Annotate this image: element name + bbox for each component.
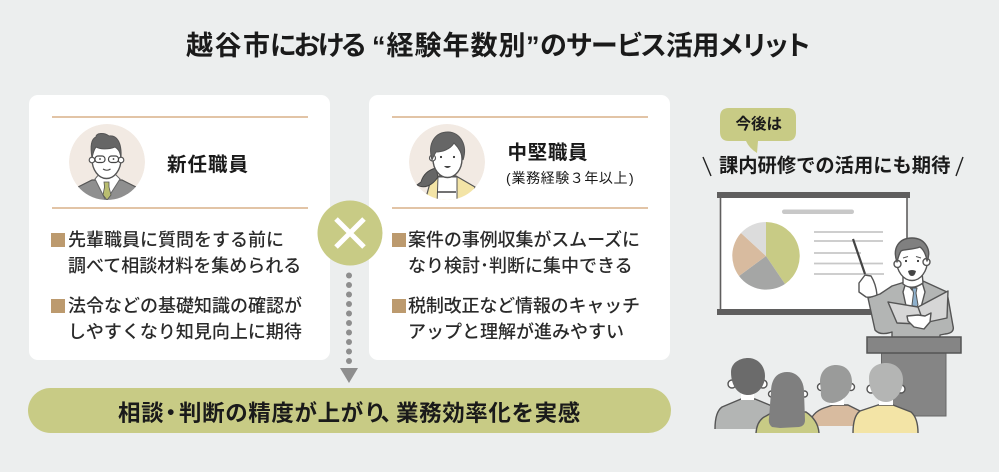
title: 越谷市 bbox=[186, 31, 270, 61]
title: 経験年数別 bbox=[386, 31, 526, 61]
heading: new staff: 新任職員 bbox=[167, 154, 248, 176]
pie chart bbox=[732, 222, 800, 290]
illustration: presentation screen with pie chart bbox=[717, 192, 910, 315]
text: experience note: 業務経験３年以上 bbox=[512, 170, 628, 186]
text block: mid-career benefit 2: アップと理解が進みやすい bbox=[408, 321, 624, 342]
title: のサービス活用メリット bbox=[540, 31, 810, 61]
text block: mid-career benefit 2 bbox=[392, 296, 640, 342]
callout: from now on: 今後は bbox=[736, 114, 782, 133]
text block: mid-career benefit 1 bbox=[392, 229, 640, 276]
icon: multiply sign bbox=[318, 200, 382, 266]
arrow: dotted down arrow bbox=[340, 272, 358, 383]
audience member 1 bbox=[715, 358, 781, 429]
banner: conclusion: 業務効率化を実感 bbox=[396, 401, 581, 426]
banner: conclusion: 、 bbox=[380, 401, 404, 426]
text block: new staff benefit 2 bbox=[51, 295, 302, 342]
title: “ bbox=[372, 31, 386, 61]
banner: conclusion bbox=[28, 388, 671, 433]
text: experience note: ( bbox=[506, 170, 511, 186]
heading: expected use in training: 課内研修での活用にも期待 bbox=[719, 155, 950, 177]
banner: conclusion: 判断の精度が上がり bbox=[179, 400, 387, 426]
text block: new staff benefit 1: 調べて相談材料を集められる bbox=[68, 256, 301, 276]
banner: conclusion: 相談 bbox=[118, 401, 164, 426]
audience member 3 bbox=[808, 365, 862, 426]
text block: mid-career benefit 1: なり検討･判断に集中できる bbox=[408, 256, 633, 276]
text block: mid-career benefit 2: 税制改正など情報のキャッチ bbox=[408, 296, 640, 316]
callout: from now on bbox=[720, 108, 796, 153]
icon: male staff avatar bbox=[69, 124, 145, 205]
title: における bbox=[270, 31, 366, 61]
heading: mid-career staff: 中堅職員 bbox=[508, 142, 588, 164]
text block: new staff benefit 2: しやすくなり知見向上に期待 bbox=[68, 322, 302, 342]
text block: mid-career benefit 1: 案件の事例収集がスムーズに bbox=[408, 229, 640, 250]
icon: female staff avatar bbox=[409, 124, 485, 205]
text: experience note: ) bbox=[629, 170, 634, 186]
title bbox=[186, 31, 810, 61]
text block: new staff benefit 1: 先輩職員に質問をする前に bbox=[68, 230, 284, 250]
banner: conclusion: ・ bbox=[160, 401, 183, 426]
illustration: lectern bbox=[867, 337, 961, 416]
illustration: audience bbox=[715, 358, 918, 433]
text block: new staff benefit 2: 法令などの基礎知識の確認が bbox=[68, 295, 302, 316]
audience member 4 bbox=[853, 363, 918, 433]
audience member 2 bbox=[756, 372, 819, 433]
title: ” bbox=[526, 31, 540, 61]
panel: mid-career staff bbox=[369, 95, 670, 360]
panel: new staff bbox=[29, 95, 330, 360]
illustration: presenter bbox=[853, 238, 953, 338]
text block: new staff benefit 1 bbox=[51, 230, 301, 276]
